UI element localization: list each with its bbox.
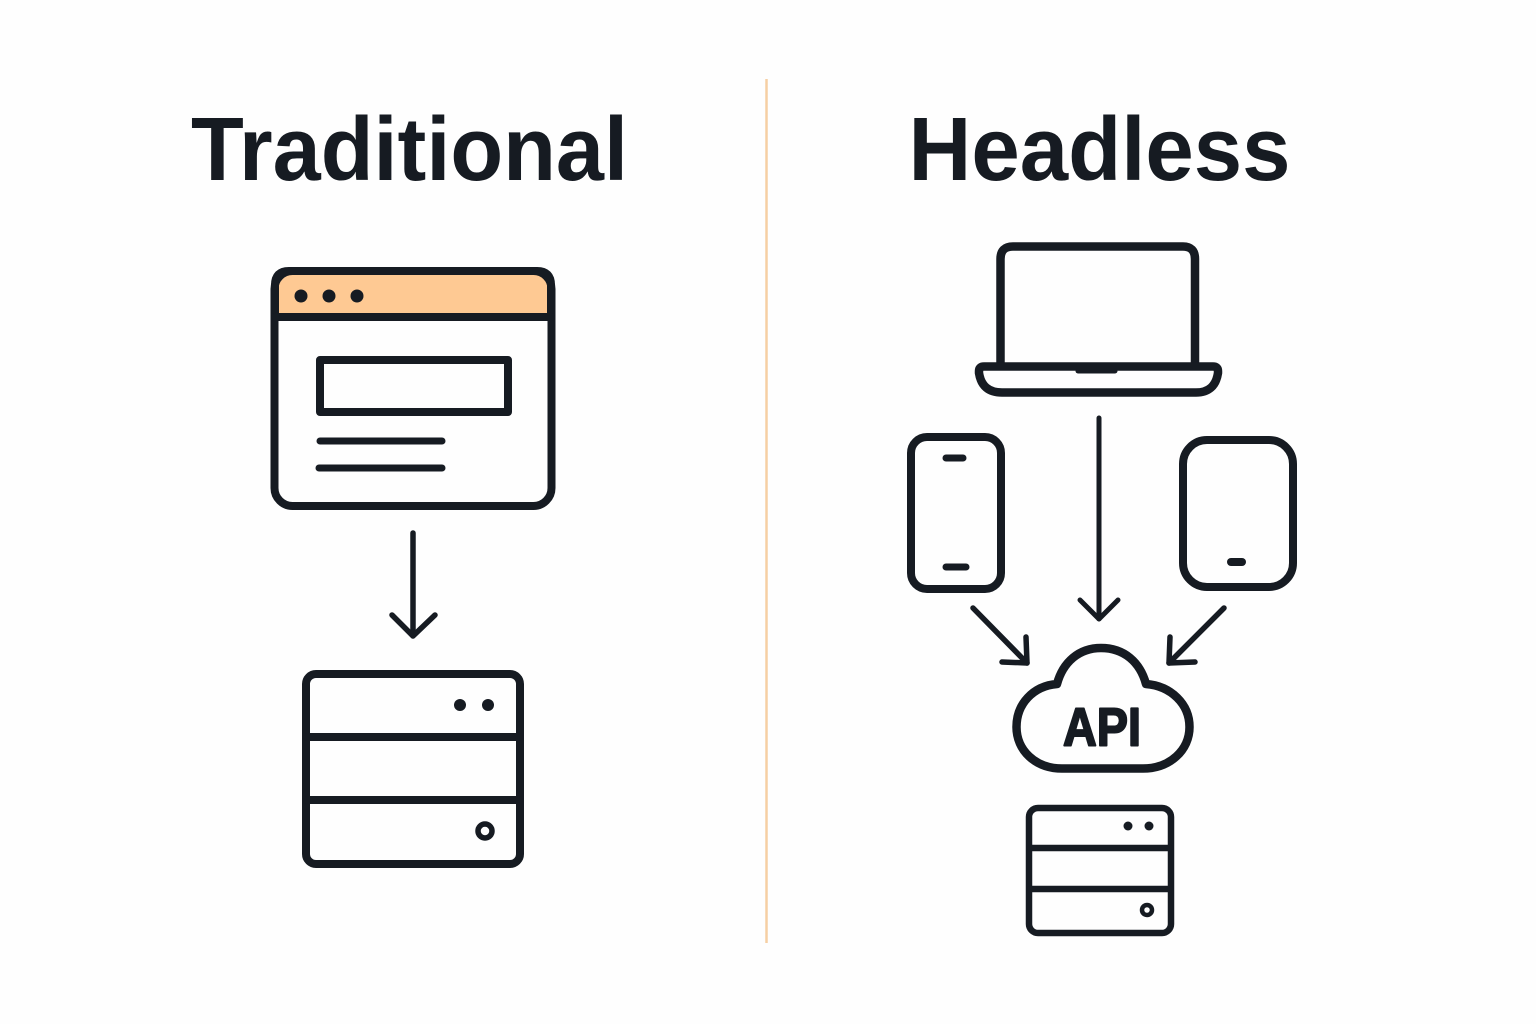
arrow: browser to server: [392, 533, 435, 636]
title: Traditional: Traditional: [191, 100, 628, 200]
cloud label: API: [1063, 698, 1141, 758]
icon: browser window: [274, 271, 552, 506]
icon: phone: [911, 437, 1001, 589]
icon: laptop: [979, 246, 1218, 392]
title: Headless: Headless: [908, 100, 1290, 200]
browser dots: [294, 290, 364, 302]
arrow: laptop to API: [1080, 418, 1118, 619]
icon: small server: [1029, 808, 1171, 933]
icon: large server: [306, 674, 520, 864]
arrow: tablet to API: [1169, 608, 1224, 663]
arrow: phone to API: [973, 608, 1027, 663]
icon: API cloud: [1016, 648, 1190, 768]
center divider: [765, 79, 768, 943]
icon: tablet: [1183, 440, 1293, 587]
